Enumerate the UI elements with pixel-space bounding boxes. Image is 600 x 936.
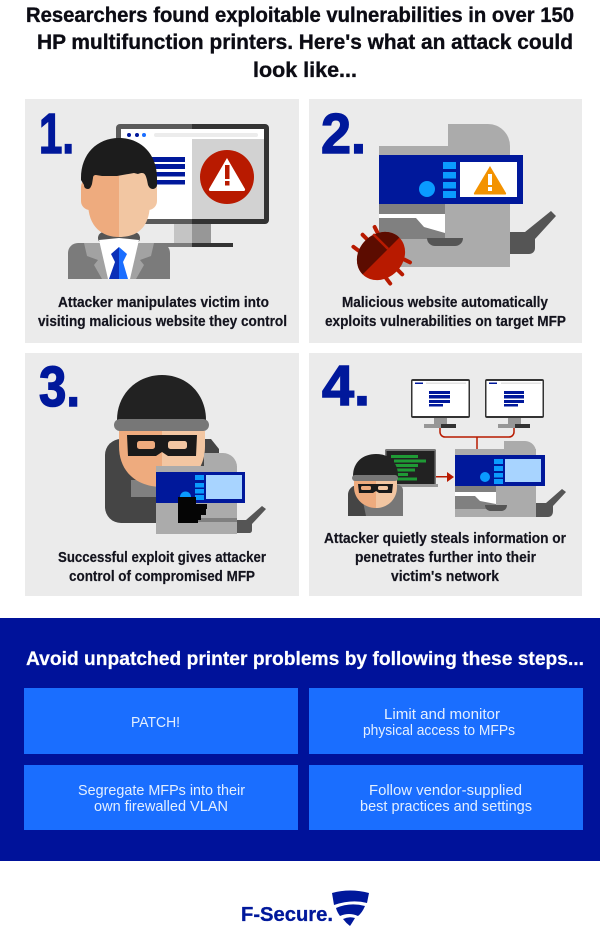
caption 4: penetrates further into their	[355, 550, 536, 566]
step number 4: 4.	[322, 354, 370, 418]
caption 3: control of compromised MFP	[69, 569, 255, 585]
step box: physical access: Limit and monitor	[384, 706, 500, 723]
caption 4: victim's network	[391, 569, 500, 585]
panel: step 4	[309, 353, 582, 596]
caption 3: Successful exploit gives attacker	[58, 550, 266, 566]
caption 4	[324, 531, 566, 585]
icon: printer	[455, 441, 566, 517]
panel: step 1	[25, 99, 299, 343]
icon: network monitors	[411, 379, 544, 449]
step box: vendor practices	[309, 765, 583, 830]
step box: physical access: physical access to MFPs	[363, 722, 515, 739]
caption 2: Malicious website automatically	[342, 295, 548, 311]
caption 2	[325, 295, 566, 330]
title: HP multifunction printers. Here's what an attack could	[37, 31, 573, 54]
step box: segregate	[24, 765, 298, 830]
arrow: attacker to printer	[436, 472, 454, 482]
caption 4: Attacker quietly steals information or	[324, 531, 566, 547]
icon: victim	[68, 138, 170, 279]
caption 2: exploits vulnerabilities on target MFP	[325, 314, 566, 330]
panel: recommendations	[0, 618, 600, 861]
title: Researchers found exploitable vulnerabilities in over 150	[26, 4, 574, 27]
recommendations heading: Avoid unpatched printer problems by following these steps...	[26, 648, 584, 670]
caption 1	[38, 295, 287, 330]
icon: attacker with laptop	[348, 449, 438, 516]
step box: segregate: own firewalled VLAN	[94, 798, 228, 815]
icon: bug	[343, 218, 419, 294]
caption 1: visiting malicious website they control	[38, 314, 287, 330]
icon: shield	[332, 890, 369, 926]
title	[26, 4, 574, 82]
step number 3: 3.	[39, 355, 80, 419]
step box: patch	[24, 688, 298, 754]
panel: step 3	[25, 353, 299, 596]
title: look like...	[253, 59, 357, 82]
icon: monitor with warning	[116, 124, 269, 247]
panel: step 2	[309, 99, 582, 343]
caption 1: Attacker manipulates victim into	[58, 295, 269, 311]
icon: printer with warning	[379, 124, 556, 267]
step box: segregate: Segregate MFPs into their	[78, 782, 245, 799]
step box: vendor practices: Follow vendor-supplied	[369, 782, 522, 799]
step number 2: 2.	[321, 102, 366, 166]
logo: F-Secure	[241, 890, 369, 926]
step box: vendor practices: best practices and settings	[360, 798, 532, 815]
logo: F-Secure: F-Secure.	[241, 904, 333, 926]
step number 1: 1.	[39, 102, 74, 166]
step box: physical access	[309, 688, 583, 754]
step box: patch: PATCH!	[131, 714, 180, 731]
caption 3	[58, 550, 266, 585]
icon: masked attacker at printer	[105, 375, 266, 534]
